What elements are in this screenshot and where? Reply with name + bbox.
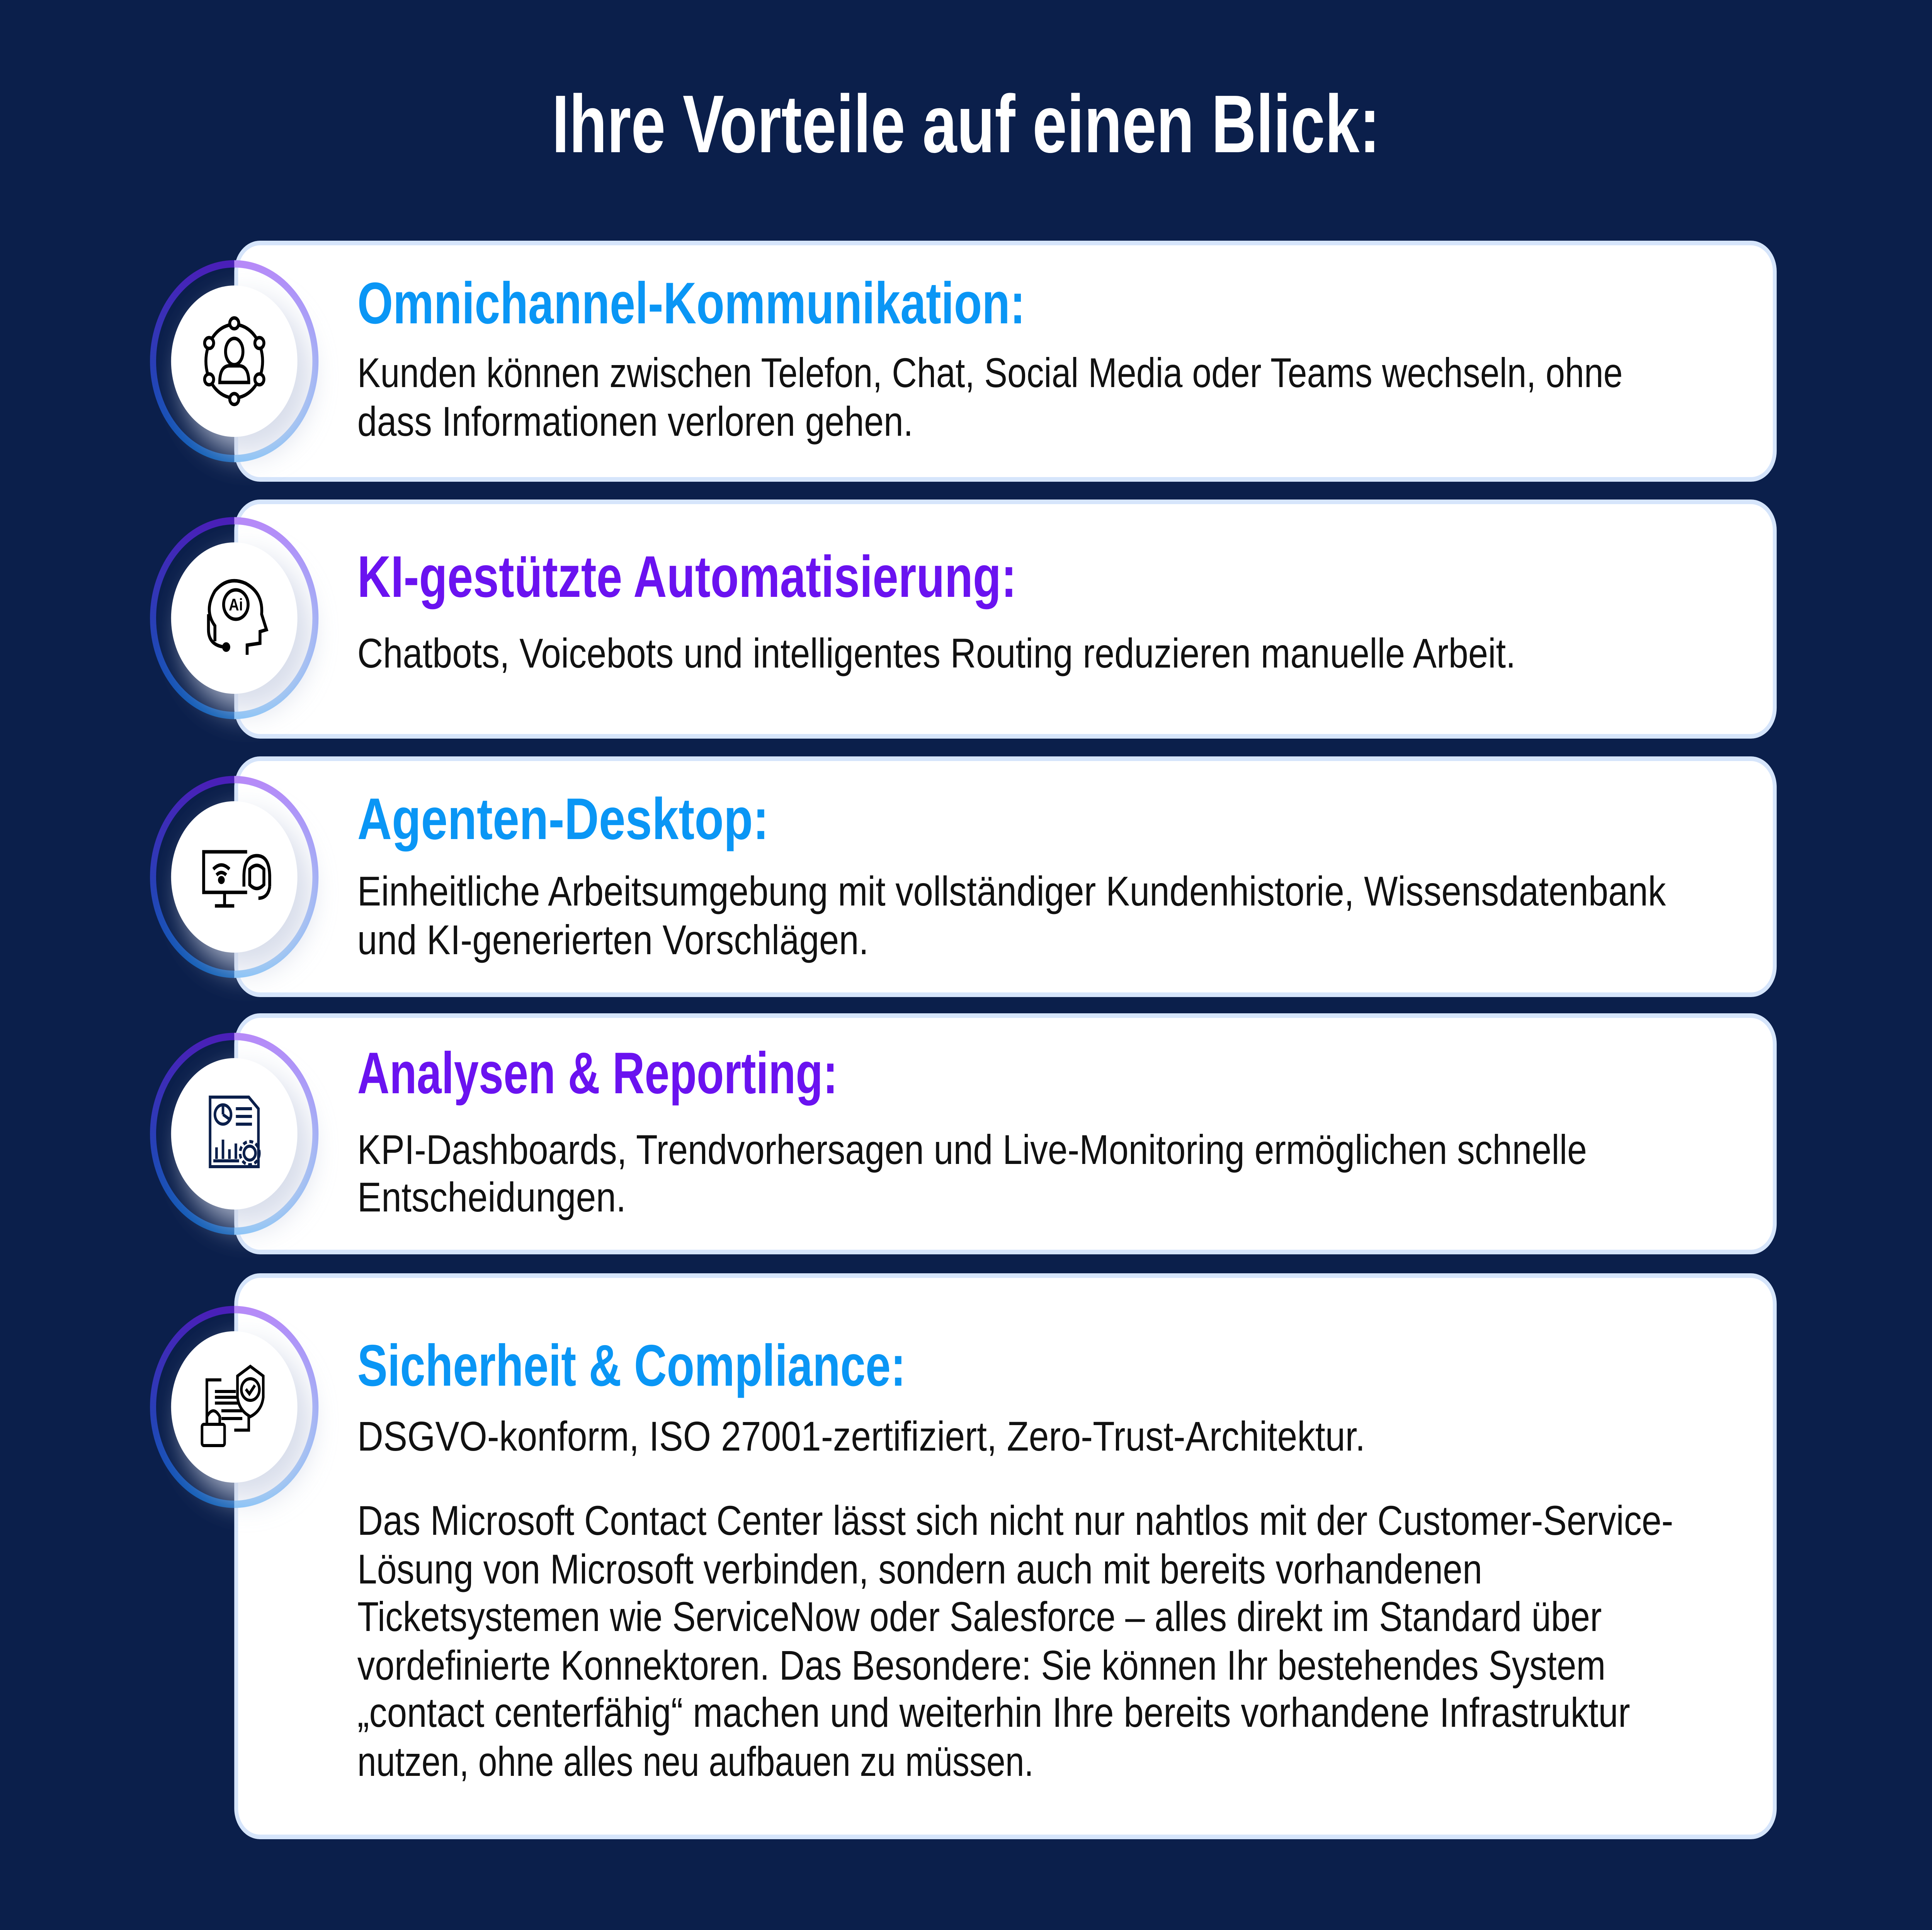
icon: AI head <box>153 521 315 715</box>
body text: Einheitliche Arbeitsumgebung mit vollständiger Kundenhistorie, Wissensdatenbank <box>357 868 1666 915</box>
icon: AI head: Ai <box>229 595 243 614</box>
title: Ihre Vorteile auf einen Blick: <box>552 78 1380 170</box>
body text: und KI-generierten Vorschlägen. <box>357 917 869 963</box>
body text: KPI-Dashboards, Trendvorhersagen und Live-Monitoring ermöglichen schnelle <box>357 1126 1587 1173</box>
body text: dass Informationen verloren gehen. <box>357 398 913 445</box>
heading: KI-gestützte Automatisierung: <box>357 544 1017 610</box>
body text <box>357 350 1622 445</box>
panel: Omnichannel-Kommunikation <box>153 243 1775 479</box>
body text: Kunden können zwischen Telefon, Chat, Social Media oder Teams wechseln, ohne <box>357 350 1622 396</box>
body text <box>357 1126 1587 1221</box>
paragraph: „contact centerfähig“ machen und weiterhin Ihre bereits vorhandene Infrastruktur <box>357 1689 1630 1736</box>
paragraph: Das Microsoft Contact Center lässt sich nicht nur nahtlos mit der Customer-Service- <box>357 1497 1673 1544</box>
paragraph: Lösung von Microsoft verbinden, sondern auch mit bereits vorhandenen <box>357 1546 1482 1593</box>
heading: Analysen & Reporting: <box>357 1040 838 1106</box>
body text: DSGVO-konform, ISO 27001-zertifiziert, Zero-Trust-Architektur. <box>357 1413 1365 1460</box>
paragraph: nutzen, ohne alles neu aufbauen zu müssen. <box>357 1738 1034 1785</box>
panel: Sicherheit & Compliance <box>153 1276 1775 1837</box>
heading: Sicherheit & Compliance: <box>357 1332 906 1398</box>
panel: KI-gestützte Automatisierung <box>153 502 1775 736</box>
heading: Agenten-Desktop: <box>357 786 769 852</box>
paragraph <box>357 1497 1673 1785</box>
icon: people network <box>153 264 315 459</box>
body text: Entscheidungen. <box>357 1174 626 1221</box>
icon: desktop with headset <box>153 780 315 974</box>
panel: Analysen & Reporting <box>153 1016 1775 1252</box>
icon: report <box>153 1036 315 1231</box>
icon: document with shield and lock <box>153 1310 315 1504</box>
body text: Chatbots, Voicebots und intelligentes Routing reduzieren manuelle Arbeit. <box>357 630 1516 677</box>
paragraph: vordefinierte Konnektoren. Das Besondere: Sie können Ihr bestehendes System <box>357 1642 1605 1689</box>
panel: Agenten-Desktop <box>153 759 1775 995</box>
body text <box>357 868 1666 963</box>
heading: Omnichannel-Kommunikation: <box>357 270 1025 336</box>
paragraph: Ticketsystemen wie ServiceNow oder Salesforce – alles direkt im Standard über <box>357 1594 1602 1640</box>
